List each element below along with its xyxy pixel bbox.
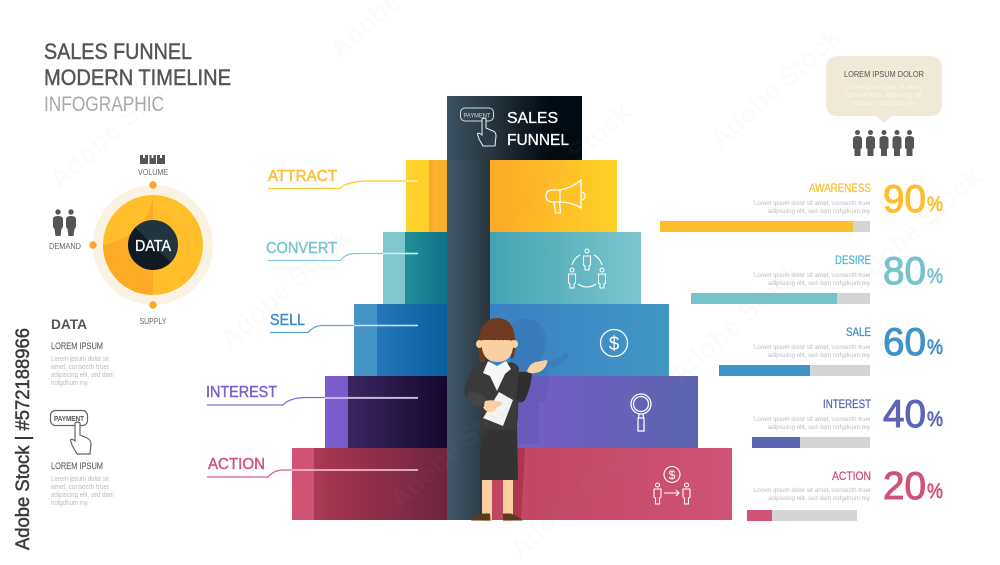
label: action: ACTION: [208, 456, 265, 473]
icon: dollar coin: $: [609, 334, 620, 355]
icon: five people: [853, 130, 914, 156]
stock watermark: Adobe Stock: [214, 221, 357, 354]
metric: sale 60%: [719, 321, 943, 376]
metric: desire 80%: [691, 250, 943, 304]
left text: lorem block: amet, consecth truer: [51, 484, 110, 491]
icon: three people cycle: [568, 249, 606, 288]
metric: interest 40%: INTEREST: [823, 397, 872, 411]
icon: dollar coin: [600, 330, 628, 356]
icon: demand people: [53, 209, 76, 236]
funnel step: action: [292, 448, 732, 520]
title: [44, 39, 231, 116]
label: sell: SELL: [270, 312, 305, 329]
funnel step: sell: [354, 304, 669, 376]
circular data diagram: VOLUME: [138, 167, 168, 177]
tablet and hand: [483, 392, 513, 426]
icon: payment hand in header: [460, 108, 496, 146]
left text: lorem block: Lorem ipsum dolor sit: [51, 476, 109, 483]
left text: data block: LOREM IPSUM: [51, 341, 103, 352]
central pillar and header: SALES: [507, 110, 558, 127]
icon: payment button and hand: [50, 410, 91, 454]
skirt: [480, 425, 518, 480]
jacket: [464, 362, 519, 430]
metric: action 20%: Lorem ipsum dolor sit amet, consecth truer: [754, 487, 872, 494]
icon: volume boxes: [140, 155, 165, 164]
metric: desire 80%: DESIRE: [835, 253, 871, 267]
shirt: [483, 361, 511, 391]
metric: interest 40%: 40: [883, 393, 926, 436]
legs and shoes: [482, 478, 513, 521]
metric: interest 40%: adipiscing elit, sed dam nofgdnum my.: [768, 424, 871, 431]
metric: action 20%: %: [927, 480, 943, 503]
stock watermark: Adobe Stock: [384, 381, 527, 514]
metric: desire 80%: adipiscing elit, sed dam nofgdnum my.: [768, 280, 871, 287]
left text: data block: amet, consecth truer: [51, 364, 110, 371]
label: attract: ATTRACT: [268, 168, 337, 185]
left text: data block: [51, 316, 114, 387]
stock watermark: Adobe Stock: [504, 431, 647, 564]
metric: sale 60%: adipiscing elit, sed dam nofgdnum my.: [768, 352, 871, 359]
metric: sale 60%: Lorem ipsum dolor sit amet, consecth truer: [754, 344, 872, 351]
label: interest: INTEREST: [206, 384, 277, 401]
speech bubble: sed dam nofgdnum my: [853, 100, 916, 107]
stock watermark: Adobe Stock: [704, 21, 847, 154]
stock watermark: Adobe Stock: [494, 96, 637, 229]
left text: lorem block: adipiscing elit, sed dam: [51, 492, 114, 499]
right arm and hand: [516, 372, 532, 402]
central pillar and header: [447, 96, 582, 520]
metric: desire 80%: 80: [883, 250, 926, 293]
left text: lorem block: LOREM IPSUM: [51, 461, 103, 472]
metric: interest 40%: %: [927, 408, 943, 431]
central pillar and header: FUNNEL: [507, 132, 569, 149]
metric: sale 60%: %: [927, 336, 943, 359]
metric: awareness 90%: %: [927, 193, 943, 216]
circular data diagram: [49, 155, 213, 326]
label: interest: [206, 384, 418, 405]
figure shadow: [503, 319, 569, 521]
metric: awareness 90%: Lorem ipsum dolor sit amet, consecth truer: [754, 200, 872, 207]
circular data diagram: DATA: [135, 238, 172, 255]
stock watermark: Adobe Stock: [44, 61, 187, 194]
circular data diagram: DEMAND: [49, 241, 81, 251]
metric: action 20%: 20: [883, 465, 926, 508]
metric: awareness 90%: AWARENESS: [809, 181, 871, 195]
funnel step: interest: [325, 376, 698, 448]
metric: action 20%: adipiscing elit, sed dam nofgdnum my.: [768, 495, 871, 502]
label: action: [207, 456, 418, 477]
circular data diagram: SUPPLY: [140, 316, 167, 326]
metric: action 20%: ACTION: [832, 469, 871, 483]
metric: awareness 90%: adipiscing elit, sed dam nofgdnum my.: [768, 208, 871, 215]
left text: data block: DATA: [51, 316, 87, 332]
left text: data block: nofgdhum my.: [51, 380, 89, 387]
icon: payment hand in header: PAYMENT: [464, 112, 491, 120]
left text: data block: Lorem ipsum dolor sit: [51, 356, 109, 363]
icon: money transfer people: [654, 466, 690, 504]
text: $: [669, 468, 676, 482]
label: attract: [268, 168, 418, 188]
icon: magnifier: [631, 394, 651, 431]
businesswoman figure: [464, 318, 569, 521]
metric: action 20%: [747, 465, 943, 521]
stock watermark: Adobe Stock: [844, 161, 987, 294]
stock watermark: Adobe Stock: [664, 256, 807, 389]
speech bubble: [826, 56, 942, 123]
metric: sale 60%: SALE: [846, 325, 871, 339]
metric: sale 60%: 60: [883, 321, 926, 364]
left text: lorem block: nofgdhum my.: [51, 500, 89, 507]
icon: payment button and hand: PAYMENT: [54, 414, 84, 423]
metric: desire 80%: %: [927, 265, 943, 288]
metric: interest 40%: Lorem ipsum dolor sit amet, consecth truer: [754, 416, 872, 423]
title: SALES FUNNEL: [44, 39, 192, 64]
label: sell: [270, 312, 418, 332]
icon: megaphone: [546, 180, 585, 213]
metric: awareness 90%: [660, 178, 943, 232]
ears and face: [476, 340, 518, 348]
speech bubble: consecth true, adipiscing elit,: [844, 92, 924, 99]
label: convert: CONVERT: [266, 240, 337, 257]
hair: [478, 318, 515, 362]
funnel step: attract: [406, 160, 617, 232]
metric: awareness 90%: 90: [883, 178, 926, 221]
funnel step: convert: [383, 232, 641, 304]
left text: lorem block: [51, 461, 114, 507]
label: convert: [266, 240, 418, 260]
speech bubble: Lorem ipsum dolor sit amet,: [847, 84, 921, 91]
speech bubble: LOREM IPSUM DOLOR: [844, 69, 924, 79]
left text: data block: adipiscing elit, sed dam: [51, 372, 114, 379]
title: MODERN TIMELINE: [44, 65, 231, 90]
stock id vertical text: Adobe Stock | #572188966: [12, 328, 34, 550]
title: INFOGRAPHIC: [44, 93, 164, 116]
metric: desire 80%: Lorem ipsum dolor sit amet, consecth truer: [754, 272, 872, 279]
metric: interest 40%: [752, 393, 943, 448]
